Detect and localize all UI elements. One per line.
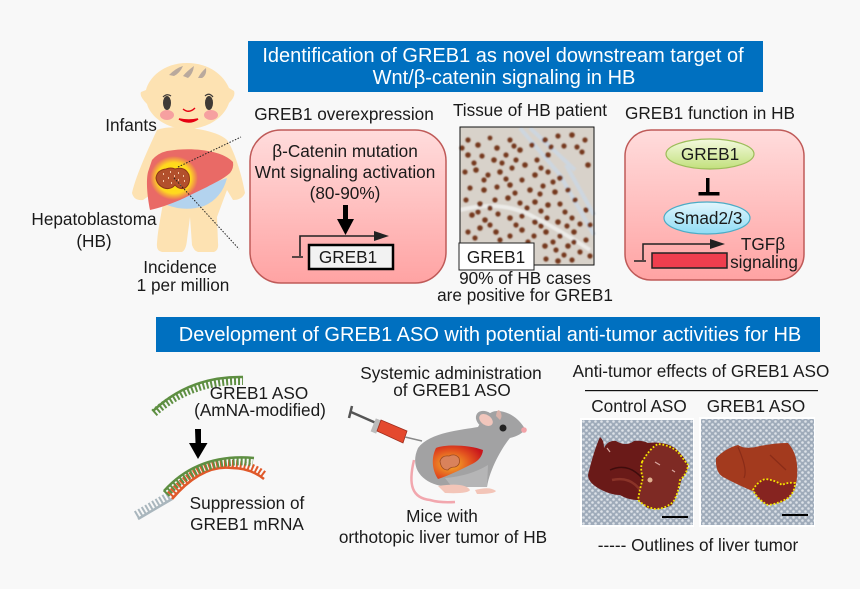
label: mice with tumor: Mice with bbox=[406, 506, 478, 526]
ears bbox=[472, 407, 500, 433]
heading banner: identification: Wnt/β-catenin signaling in HB bbox=[373, 67, 635, 89]
scale bar bbox=[782, 514, 808, 516]
photo: control liver bbox=[580, 418, 694, 527]
panel: GREB1 overexpression: Wnt signaling activation bbox=[255, 162, 435, 182]
caption: 90% of HB cases: are positive for GREB1 bbox=[437, 285, 613, 305]
icon: ASO bound to mRNA bbox=[136, 457, 264, 519]
diaper bbox=[165, 178, 227, 209]
label: systemic administration: of GREB1 ASO bbox=[393, 380, 511, 400]
label: incidence: Incidence bbox=[143, 257, 217, 277]
label: Infants: Infants bbox=[105, 115, 157, 135]
feet bbox=[438, 485, 470, 493]
mouse tumor bbox=[440, 455, 460, 470]
label: incidence: 1 per million bbox=[137, 275, 229, 295]
tumor outline bbox=[638, 444, 688, 509]
gene: GREB1 with promoter arrow bbox=[292, 231, 393, 269]
panel: GREB1 function bbox=[625, 130, 804, 280]
tumor bbox=[150, 156, 198, 200]
legend: outlines of liver tumor: ----- Outlines of liver tumor bbox=[598, 535, 799, 555]
gene: TGFβ signaling: TGFβ bbox=[741, 234, 785, 254]
node: GREB1 bbox=[666, 139, 754, 169]
tail bbox=[411, 460, 455, 502]
arrow: down bbox=[189, 429, 208, 459]
hair bbox=[169, 66, 183, 76]
gene: GREB1 with promoter arrow: GREB1 bbox=[319, 247, 377, 267]
dotted lines bbox=[174, 137, 241, 249]
label: GREB1 ASO: GREB1 ASO bbox=[707, 396, 805, 416]
node: Smad2/3: Smad2/3 bbox=[674, 208, 742, 228]
eye and nose bbox=[500, 424, 506, 432]
label: Suppression of GREB1 mRNA: Suppression of bbox=[190, 493, 304, 513]
label: GREB1 ASO (AmNA-modified): GREB1 ASO bbox=[210, 383, 308, 403]
label: Hepatoblastoma (HB): (HB) bbox=[76, 231, 112, 251]
head bbox=[141, 63, 234, 129]
mouse liver bbox=[433, 446, 483, 479]
heading: tissue of HB patient: Tissue of HB patient bbox=[453, 100, 607, 120]
photo: GREB1 ASO liver bbox=[699, 417, 815, 527]
inhibition symbol bbox=[698, 178, 720, 196]
icon: GREB1 ASO strand bbox=[153, 377, 243, 413]
icon: syringe bbox=[349, 406, 422, 443]
label: systemic administration: Systemic administration bbox=[360, 363, 542, 383]
scale bar bbox=[662, 516, 688, 518]
label: Hepatoblastoma (HB): Hepatoblastoma bbox=[31, 209, 157, 229]
icon: infant with liver tumor bbox=[132, 63, 245, 252]
heading: anti-tumor effects: Anti-tumor effects of GREB1 ASO bbox=[573, 361, 829, 381]
panel: GREB1 overexpression: (80-90%) bbox=[310, 183, 380, 203]
heading banner: identification bbox=[248, 41, 763, 92]
label box: GREB1 bbox=[459, 243, 534, 270]
heading banner: development bbox=[156, 317, 820, 352]
face bbox=[163, 96, 171, 110]
body bbox=[415, 411, 525, 487]
caption: 90% of HB cases: 90% of HB cases bbox=[459, 268, 591, 288]
label: GREB1 ASO (AmNA-modified): (AmNA-modified) bbox=[194, 400, 326, 420]
node: Smad2/3 bbox=[664, 202, 750, 234]
node: GREB1: GREB1 bbox=[681, 144, 739, 164]
gene: TGFβ signaling bbox=[634, 234, 798, 272]
label: Control ASO: Control ASO bbox=[591, 396, 687, 416]
divider line bbox=[585, 390, 818, 391]
liver bbox=[147, 149, 233, 210]
icon: mouse with liver tumor bbox=[411, 407, 527, 502]
label: Suppression of GREB1 mRNA: GREB1 mRNA bbox=[190, 514, 304, 534]
heading: GREB1 overexpression: GREB1 overexpression bbox=[254, 104, 434, 124]
label box: GREB1: GREB1 bbox=[467, 247, 525, 267]
panel: GREB1 overexpression bbox=[250, 130, 446, 283]
heading: GREB1 function in HB: GREB1 function in HB bbox=[625, 103, 795, 123]
panel: GREB1 overexpression: β-Catenin mutation bbox=[272, 141, 418, 161]
tumor outline bbox=[753, 479, 795, 505]
histology image bbox=[459, 127, 594, 265]
arrow: down bbox=[337, 205, 354, 235]
heading banner: development: Development of GREB1 ASO with potential anti-tumor activities for HB bbox=[179, 324, 801, 346]
label: mice with tumor: orthotopic liver tumor of HB bbox=[339, 527, 547, 547]
gene: TGFβ signaling: signaling bbox=[730, 252, 798, 272]
body and limbs bbox=[132, 127, 245, 252]
heading banner: identification: Identification of GREB1 as novel downstream target of bbox=[262, 45, 744, 67]
